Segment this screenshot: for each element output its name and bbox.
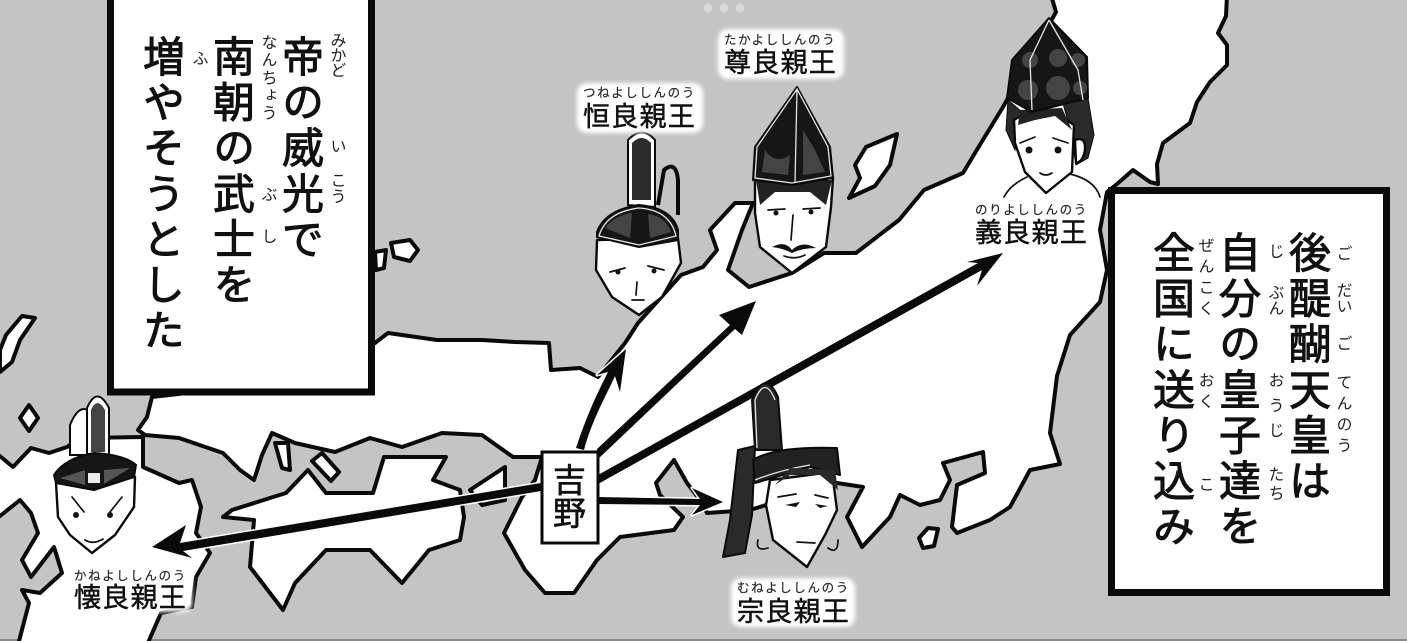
caption line 3: ぜんこく	[1196, 237, 1214, 321]
caption line 1: ご	[1334, 245, 1350, 261]
caption line 3: おく	[1196, 372, 1214, 414]
caption line 2: 南朝の武士を	[208, 35, 254, 309]
name: 宗良親王: むねよししんのう	[737, 581, 850, 595]
land: Kyushu	[0, 437, 210, 641]
caption line 2: ぶん	[1266, 284, 1284, 316]
caption line 1: みかど	[328, 32, 346, 77]
portrait: 懐良親王	[54, 396, 136, 553]
land: Honshu	[138, 0, 1227, 593]
arrow to 尊良親王	[597, 301, 756, 459]
caption line 2: おうじ	[1266, 372, 1284, 447]
caption line 1: い	[328, 138, 344, 154]
caption line 3: こ	[1196, 476, 1212, 492]
caption line 2	[208, 34, 278, 309]
name: 懐良親王: 懐良親王	[74, 583, 187, 613]
arrow to 宗良親王	[598, 488, 723, 515]
caption line 2: し	[258, 228, 276, 244]
land: small islands	[0, 134, 938, 548]
arrow to 恒良親王	[576, 349, 626, 450]
name: 懐良親王	[68, 566, 192, 613]
place label: 吉野: 吉野	[548, 463, 586, 529]
caption line 3	[138, 35, 208, 354]
name: 義良親王	[975, 203, 1088, 248]
name: 恒良親王: 恒良親王	[583, 102, 696, 132]
name: 宗良親王: 宗良親王	[737, 597, 850, 627]
name: 宗良親王	[731, 578, 855, 627]
arrows from Yoshino	[152, 253, 1003, 558]
land: Shikoku	[223, 457, 464, 610]
name: 義良親王: のりよししんのう	[975, 203, 1088, 217]
caption line 3: 全国に送り込み	[1148, 231, 1194, 550]
arrow to 義良親王	[598, 253, 1003, 484]
caption line 3: 増やそうとした	[138, 35, 184, 354]
caption line 1: 後醍醐天皇は	[1284, 231, 1330, 505]
caption line 1: ご	[1334, 335, 1350, 351]
portrait: 宗良親王	[723, 383, 840, 567]
caption line 1: こう	[328, 172, 344, 204]
text box: left caption	[110, 0, 372, 392]
name: 恒良親王	[577, 83, 703, 133]
name: 義良親王: 義良親王	[975, 218, 1088, 248]
name: 尊良親王: 尊良親王	[724, 48, 837, 78]
portrait: 義良親王	[1004, 18, 1100, 197]
caption line 2	[1214, 231, 1284, 550]
name: 尊良親王	[718, 29, 844, 79]
caption line 2: なんちょう	[258, 34, 276, 122]
caption line 2: じ	[1266, 243, 1282, 259]
text box: right caption	[1112, 190, 1386, 592]
caption line 1: だい	[1334, 282, 1352, 314]
caption line 1: 帝の威光で	[276, 35, 324, 263]
portrait: 恒良親王	[596, 132, 681, 315]
arrow to 懐良親王	[152, 483, 541, 558]
caption line 1	[1284, 231, 1352, 505]
caption line 2: たち	[1266, 466, 1284, 504]
caption line 1: てんのう	[1334, 374, 1352, 458]
caption line 3: ふ	[190, 50, 208, 66]
portrait: 尊良親王	[753, 87, 833, 273]
name: 尊良親王: たかよししんのう	[724, 33, 836, 47]
place label: 吉野	[542, 452, 598, 543]
caption line 1	[276, 32, 346, 263]
name: 懐良親王: かねよししんのう	[74, 569, 187, 583]
name: 恒良親王: つねよししんのう	[583, 86, 696, 100]
caption line 2: 自分の皇子達を	[1214, 231, 1260, 550]
caption line 2: ぶ	[258, 186, 278, 202]
land: Awaji island	[470, 467, 505, 505]
